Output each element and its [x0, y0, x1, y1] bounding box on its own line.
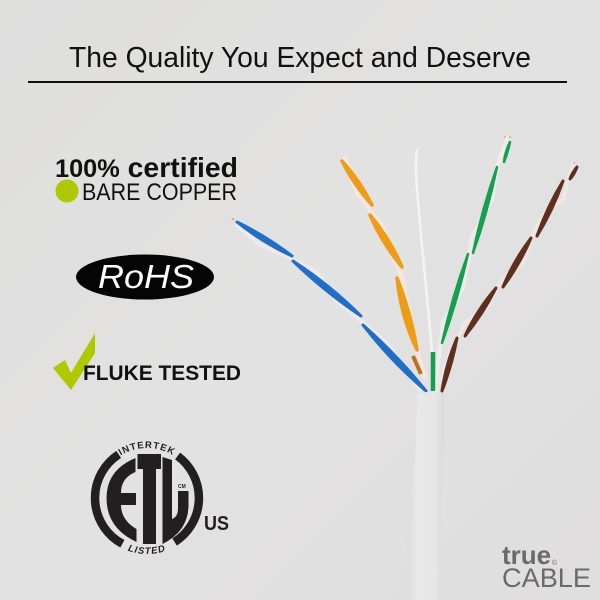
- badge: 100% certified bare copper: [55, 152, 238, 206]
- brown twisted pair: [437, 163, 577, 391]
- cable: [232, 136, 577, 600]
- icon: green check mark: [53, 333, 95, 390]
- badge: RoHS: RoHS: [98, 258, 194, 295]
- icon: green dot: [56, 180, 78, 202]
- ETL letterforms: [106, 454, 188, 544]
- outer ring: [95, 454, 122, 544]
- logo: trueCABLE: CABLE: [502, 563, 591, 593]
- intertek arc text: INTERTEK: [118, 441, 176, 456]
- badge: ETL listed logo: [90, 441, 229, 554]
- logo: trueCABLE: ©: [552, 559, 558, 567]
- CM mark: CM: [178, 484, 186, 490]
- badge: Fluke tested: [53, 333, 241, 390]
- green twisted pair: [433, 138, 510, 391]
- badge: RoHS: [76, 254, 214, 300]
- white strand: [416, 150, 435, 392]
- wire tips: [232, 136, 575, 220]
- US text: US: [204, 513, 229, 535]
- listed arc text: LISTED: [128, 544, 164, 554]
- cable jacket: [407, 392, 444, 600]
- bare copper text: BARE COPPER: [82, 179, 237, 206]
- title: The Quality You Expect and Deserve: [69, 42, 531, 74]
- logo: trueCABLE: [502, 540, 591, 593]
- logo: trueCABLE: true: [502, 540, 551, 570]
- blue twisted pair: [237, 222, 426, 391]
- fluke tested text: FLUKE TESTED: [83, 361, 241, 385]
- title underline: [28, 81, 567, 83]
- certified text: 100% certified: [55, 152, 238, 183]
- orange twisted pair: [342, 158, 425, 377]
